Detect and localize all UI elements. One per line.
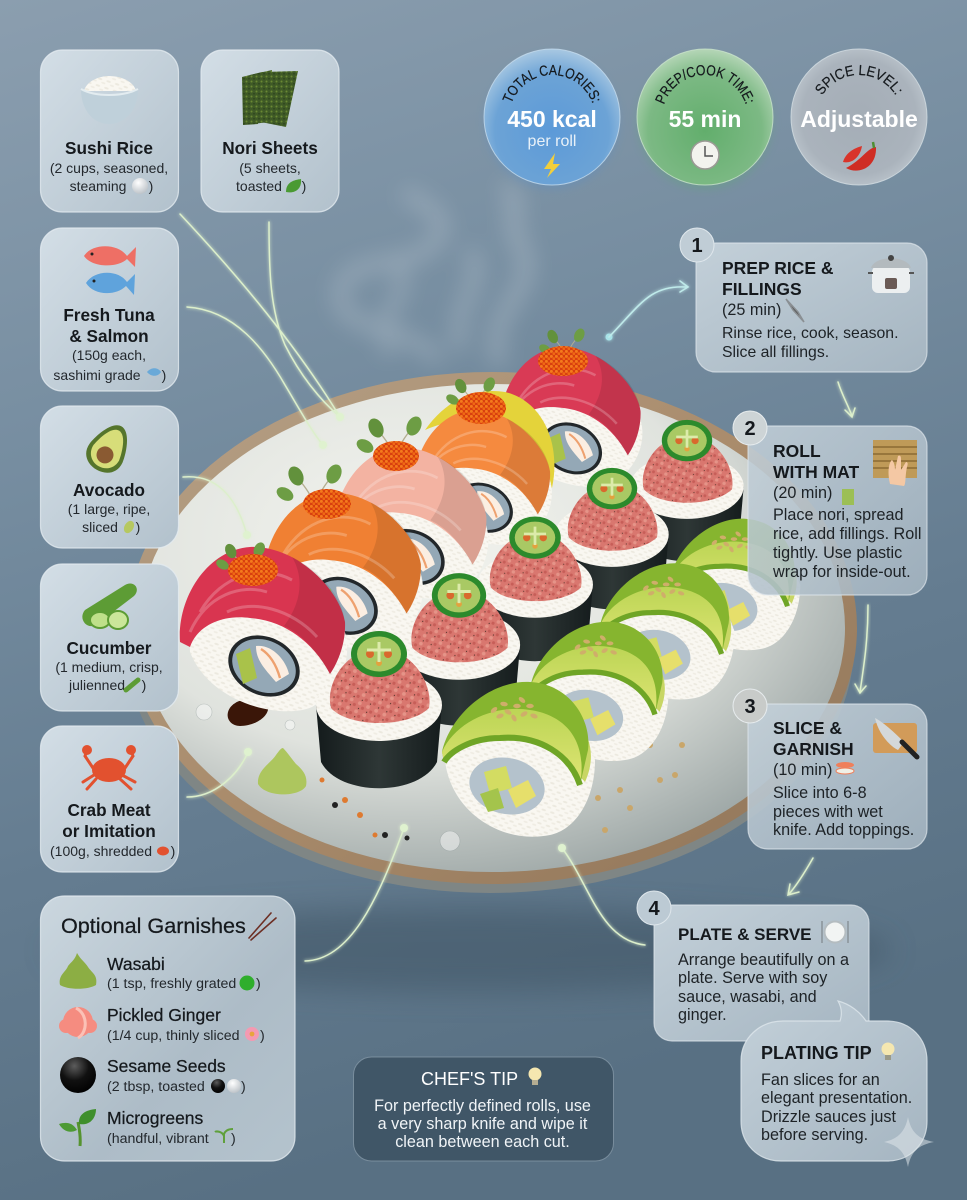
ingredient: crab bbox=[40, 726, 178, 872]
text: step 4 body bbox=[678, 951, 849, 1024]
text: sushi rice: steaming bbox=[70, 178, 126, 194]
text: step 1 body bbox=[722, 325, 898, 361]
text: plating tip body: before serving. bbox=[761, 1126, 868, 1144]
text: avocado: ) bbox=[136, 519, 140, 535]
text: crab bbox=[50, 800, 175, 859]
garnish on plate bbox=[192, 558, 685, 851]
arrow: step 2 to step 3 bbox=[855, 605, 868, 693]
text: sushi rice: Sushi Rice bbox=[65, 138, 153, 158]
plate rim bbox=[127, 372, 857, 884]
text: step 2 body bbox=[772, 506, 921, 581]
heading: slice and garnish: (10 min) bbox=[773, 761, 832, 779]
label: spice level: SPICE LEVEL: bbox=[816, 64, 902, 95]
connector lines bbox=[180, 214, 645, 961]
text: nori sheets bbox=[222, 138, 318, 194]
stat: spice level bbox=[790, 48, 928, 186]
step 1 card bbox=[680, 228, 927, 372]
text: step 4 body: ginger. bbox=[678, 1006, 727, 1024]
icon: cucumber bbox=[82, 584, 137, 629]
icon: chopsticks bbox=[249, 913, 276, 940]
item: microgreens: Microgreens bbox=[107, 1108, 204, 1128]
heading: roll with mat: WITH MAT bbox=[773, 462, 859, 482]
text: step 3 body: Slice into 6-8 bbox=[773, 784, 867, 802]
icon: rice cooker bbox=[868, 255, 914, 293]
text: chef's tip body: a very sharp knife and wipe it bbox=[378, 1115, 588, 1133]
item: pickled ginger: Pickled Ginger bbox=[107, 1005, 221, 1025]
text: step 3 body bbox=[773, 784, 914, 839]
item: sesame seeds: (2 tbsp, toasted bbox=[107, 1079, 205, 1095]
icon: knife and board bbox=[873, 718, 917, 757]
text: step 3 body: pieces with wet bbox=[773, 803, 883, 821]
heading: roll with mat bbox=[773, 441, 859, 502]
item: microgreens: ) bbox=[231, 1131, 236, 1147]
ingredient: tuna and salmon bbox=[40, 228, 178, 391]
arrow: step 3 to step 4 bbox=[788, 858, 813, 895]
heading: optional garnishes: Optional Garnishes bbox=[61, 913, 246, 938]
item: sesame seeds bbox=[60, 1056, 246, 1095]
item: microgreens: (handful, vibrant bbox=[107, 1131, 209, 1147]
badge 3: 3 bbox=[744, 696, 756, 718]
text: step 4 body: plate. Serve with soy bbox=[678, 969, 828, 987]
panel: optional garnishes bbox=[40, 896, 295, 1161]
text: plating tip body bbox=[761, 1071, 912, 1144]
icon: lightning bbox=[544, 153, 560, 178]
item: wasabi: Wasabi bbox=[107, 954, 165, 974]
callout: plating tip bbox=[741, 1001, 927, 1161]
step 3 card bbox=[733, 689, 927, 849]
text: cucumber: Cucumber bbox=[66, 638, 152, 658]
plate shadow and underside bbox=[126, 397, 854, 893]
text: tuna and salmon: & Salmon bbox=[69, 326, 149, 346]
text: plating tip body: Drizzle sauces just bbox=[761, 1108, 896, 1126]
icon: nori sheets bbox=[242, 70, 298, 127]
item: wasabi: ) bbox=[256, 976, 261, 992]
text: step 1 body: Rinse rice, cook, season. bbox=[722, 325, 898, 342]
text: sushi rice: (2 cups, seasoned, bbox=[50, 160, 168, 176]
value: 55 min: 55 min bbox=[669, 106, 741, 132]
text: avocado: (1 large, ripe, bbox=[68, 501, 150, 517]
roe and microgreens bbox=[214, 327, 588, 586]
text: crab: or Imitation bbox=[62, 821, 156, 841]
icon: rice bowl bbox=[81, 76, 138, 124]
text: tuna and salmon: sashimi grade bbox=[53, 367, 141, 383]
stat: prep cook time bbox=[636, 48, 774, 189]
badge 2: 2 bbox=[744, 418, 756, 440]
icon: light bulb bbox=[528, 1068, 542, 1085]
badge 4: 4 bbox=[648, 898, 660, 920]
item: pickled ginger: (1/4 cup, thinly sliced bbox=[107, 1028, 239, 1044]
text: cucumber: julienned bbox=[68, 677, 125, 693]
heading: prep rice: FILLINGS bbox=[722, 279, 802, 299]
text: step 3 body: knife. Add toppings. bbox=[773, 821, 914, 839]
heading: plating tip: PLATING TIP bbox=[761, 1043, 872, 1063]
text: avocado: Avocado bbox=[73, 480, 145, 500]
panel: chef's tip bbox=[354, 1057, 614, 1161]
text: tuna and salmon bbox=[53, 305, 166, 383]
text: tuna and salmon: ) bbox=[162, 367, 166, 383]
icon: plate and cutlery bbox=[822, 921, 848, 943]
heading: prep rice: (25 min) bbox=[722, 301, 781, 319]
icon: avocado bbox=[80, 417, 138, 479]
stat: total calories bbox=[484, 48, 620, 188]
icon: fish bbox=[84, 246, 136, 295]
item: sesame seeds: Sesame Seeds bbox=[107, 1056, 226, 1076]
label: prep cook time: PREP/COOK TIME: bbox=[655, 65, 754, 104]
rainbow rolls bbox=[180, 327, 642, 711]
text: avocado bbox=[68, 480, 150, 535]
value: adjustable: Adjustable bbox=[800, 106, 918, 132]
text: chef's tip body: clean between each cut. bbox=[395, 1133, 570, 1151]
heading: prep rice: PREP RICE & bbox=[722, 258, 834, 278]
text: tuna and salmon: Fresh Tuna bbox=[63, 305, 155, 325]
plate surface bbox=[139, 384, 845, 872]
text: crab: (100g, shredded bbox=[50, 843, 152, 859]
avocado rolls bbox=[442, 519, 800, 837]
arrow: plate to step 1 bbox=[606, 281, 688, 340]
item: wasabi bbox=[60, 953, 261, 992]
heading: chef's tip: CHEF'S TIP bbox=[421, 1069, 518, 1089]
text: step 2 body: Place nori, spread bbox=[773, 506, 903, 524]
heading: roll with mat: ROLL bbox=[773, 441, 821, 461]
text: crab: Crab Meat bbox=[67, 800, 151, 820]
icon: knife bbox=[786, 299, 804, 322]
item: pickled ginger: ) bbox=[260, 1028, 265, 1044]
steam bbox=[340, 185, 526, 365]
text: step 4 body: Arrange beautifully on a bbox=[678, 951, 849, 969]
ingredient: nori sheets bbox=[201, 50, 339, 212]
ingredient: avocado bbox=[40, 406, 178, 548]
item: pickled ginger bbox=[59, 1005, 265, 1044]
icon: clock bbox=[691, 141, 719, 169]
icon: crab bbox=[82, 745, 136, 789]
text: plating tip body: Fan slices for an bbox=[761, 1071, 880, 1089]
arrow: step 1 to step 2 bbox=[838, 382, 855, 417]
icon: chili peppers bbox=[843, 142, 876, 171]
text: chef's tip body: For perfectly defined rolls, use bbox=[374, 1097, 591, 1115]
heading: slice and garnish bbox=[773, 718, 854, 779]
item: microgreens bbox=[59, 1108, 236, 1147]
text: crab: ) bbox=[171, 843, 175, 859]
item: wasabi: (1 tsp, freshly grated bbox=[107, 976, 236, 992]
label: total calories: TOTAL CALORIES: bbox=[502, 64, 600, 103]
text: cucumber: (1 medium, crisp, bbox=[55, 659, 163, 675]
unit: per roll: per roll bbox=[528, 133, 576, 150]
heading: prep rice bbox=[722, 258, 834, 319]
sushi plate bbox=[126, 327, 857, 893]
text: avocado: sliced bbox=[82, 519, 118, 535]
heading: roll with mat: (20 min) bbox=[773, 484, 832, 502]
icon: bamboo leaf bbox=[842, 489, 854, 505]
text: sushi rice bbox=[50, 138, 168, 194]
ingredient: cucumber bbox=[40, 564, 178, 711]
icon: bamboo mat and hand bbox=[873, 440, 917, 486]
tuna tartare rolls bbox=[316, 420, 744, 788]
text: step 2 body: rice, add fillings. Roll bbox=[773, 525, 921, 543]
text: step 1 body: Slice all fillings. bbox=[722, 344, 829, 361]
heading: plate and serve: PLATE & SERVE bbox=[678, 925, 812, 944]
step 2 card bbox=[733, 411, 927, 595]
text: tuna and salmon: (150g each, bbox=[72, 347, 146, 363]
text: cucumber bbox=[55, 638, 163, 693]
text: sushi rice: ) bbox=[149, 178, 153, 194]
badge 1: 1 bbox=[691, 235, 703, 257]
badge 3 bbox=[733, 689, 767, 723]
badge 2 bbox=[733, 411, 767, 445]
value: 450 kcal: 450 kcal bbox=[507, 106, 597, 132]
ingredient: sushi rice bbox=[40, 50, 178, 212]
text: plating tip body: elegant presentation. bbox=[761, 1089, 912, 1107]
icon: light bulb bbox=[882, 1042, 894, 1060]
step 4 card bbox=[637, 891, 869, 1041]
item: sesame seeds: ) bbox=[241, 1079, 246, 1095]
text: nori sheets: ) bbox=[302, 178, 306, 194]
text: nori sheets: toasted bbox=[236, 178, 282, 194]
text: nori sheets: (5 sheets, bbox=[239, 160, 301, 176]
text: cucumber: ) bbox=[142, 677, 146, 693]
text: step 2 body: tightly. Use plastic bbox=[773, 544, 902, 562]
text: step 2 body: wrap for inside-out. bbox=[772, 563, 911, 581]
heading: slice and garnish: SLICE & bbox=[773, 718, 842, 738]
text: nori sheets: Nori Sheets bbox=[222, 138, 318, 158]
badge 4 bbox=[637, 891, 671, 925]
heading: slice and garnish: GARNISH bbox=[773, 739, 854, 759]
text: chef's tip body bbox=[374, 1097, 591, 1151]
badge 1 bbox=[680, 228, 714, 262]
icon: sparkle bbox=[884, 1117, 934, 1167]
text: step 4 body: sauce, wasabi, and bbox=[678, 988, 817, 1006]
icon: sushi slice bbox=[836, 762, 854, 774]
